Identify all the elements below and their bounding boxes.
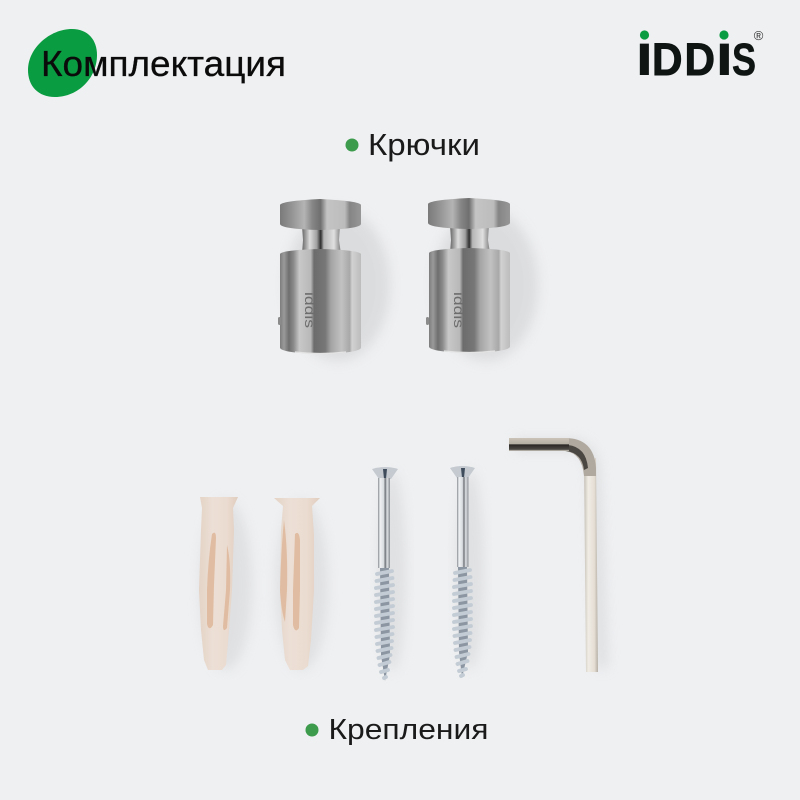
bullet bbox=[306, 724, 318, 736]
plug body bbox=[199, 497, 238, 670]
plug slot left bbox=[207, 533, 216, 628]
screw shaft bbox=[457, 477, 468, 567]
screw 2 bbox=[450, 466, 484, 678]
hooks label text: Крючки bbox=[368, 127, 480, 162]
title bbox=[28, 29, 286, 97]
hook bottom lip bbox=[295, 352, 346, 354]
plug slot right bbox=[223, 545, 230, 630]
logo letter I: I bbox=[716, 34, 733, 85]
plug slot left bbox=[280, 520, 287, 622]
logo: IDDIS bbox=[636, 28, 764, 85]
hook screw hole bbox=[278, 317, 281, 325]
wall plug 2 bbox=[274, 498, 328, 670]
hook engraving: iddis bbox=[451, 292, 467, 328]
screw head bbox=[450, 466, 475, 478]
screw thread bbox=[376, 568, 393, 681]
hook neck bbox=[302, 226, 341, 254]
hook body bbox=[280, 249, 361, 354]
plug body bbox=[274, 498, 320, 670]
hook bottom lip bbox=[444, 351, 495, 352]
hook 2 bbox=[426, 198, 538, 361]
hex key long arm bbox=[584, 458, 598, 672]
hex key bend bbox=[565, 438, 596, 476]
hook body bbox=[429, 248, 510, 353]
hook engraving: iddis bbox=[302, 292, 318, 328]
hook cap bbox=[280, 199, 361, 230]
hook screw hole bbox=[426, 317, 429, 325]
screw shaft bbox=[378, 478, 390, 568]
logo letter D: D bbox=[652, 34, 682, 85]
bullet bbox=[346, 138, 358, 152]
screw head bbox=[372, 467, 398, 479]
hook cap bbox=[428, 198, 510, 229]
logo dot right bbox=[719, 30, 729, 40]
hex key bbox=[509, 438, 602, 672]
label: fasteners bbox=[306, 714, 488, 746]
logo letter D: D bbox=[684, 34, 715, 85]
hook neck bbox=[450, 225, 490, 253]
logo letter S: S bbox=[732, 34, 756, 85]
screw 1 bbox=[372, 467, 406, 681]
label: hooks bbox=[346, 127, 480, 162]
title text: Комплектация bbox=[41, 43, 286, 84]
logo dot left bbox=[640, 30, 649, 40]
wall plug 1 bbox=[199, 497, 252, 670]
hex key short arm bbox=[509, 438, 569, 451]
icon: green blob bbox=[28, 29, 97, 97]
logo registered mark: ® bbox=[754, 28, 764, 43]
fasteners label text: Крепления bbox=[328, 714, 488, 746]
plug slot right bbox=[293, 533, 300, 630]
hook 1 bbox=[278, 199, 390, 361]
screw thread bbox=[454, 567, 471, 678]
logo letter I: I bbox=[636, 34, 653, 85]
